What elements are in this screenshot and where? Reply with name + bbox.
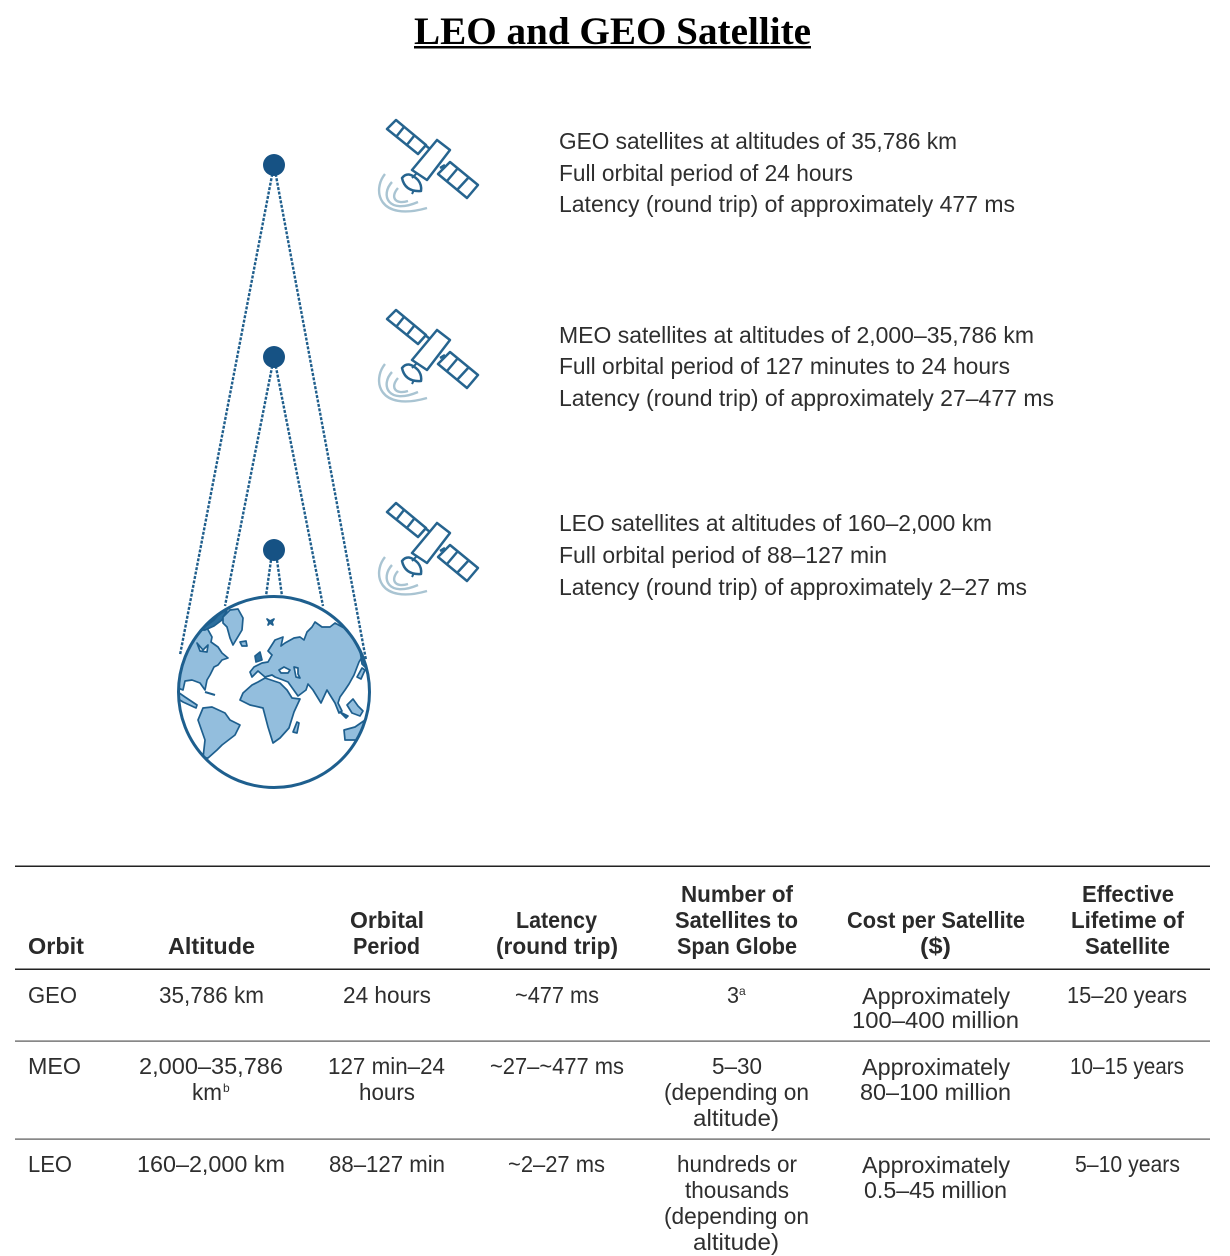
text block: LEO description: LEO satellites at altitudes of 160–2,000 km (559, 510, 992, 536)
table row: LEO: 160–2,000 km (137, 1151, 285, 1177)
table row: LEO: 5–10 years (1075, 1151, 1180, 1177)
LEO orbit dot (263, 539, 285, 561)
text block: MEO description: Full orbital period of 127 minutes to 24 hours (559, 353, 1010, 379)
table row: MEO (28, 1053, 1184, 1131)
table header row: Satellite (1085, 933, 1170, 959)
table row: MEO: hours (359, 1079, 415, 1105)
table row: MEO: b (223, 1081, 230, 1095)
eurasia (250, 622, 362, 713)
table row: LEO: ~2–27 ms (508, 1151, 605, 1177)
text block: GEO description: Latency (round trip) of approximately 477 ms (559, 191, 1015, 217)
table row: MEO: altitude) (693, 1105, 779, 1131)
table header row: Period (353, 933, 420, 959)
icon: MEO satellite (379, 310, 478, 401)
iceland (240, 641, 247, 646)
table header row: Orbit (28, 933, 84, 959)
arctic islands (198, 610, 227, 630)
madagascar (293, 722, 299, 733)
table row: GEO: 15–20 years (1067, 982, 1187, 1008)
text block: LEO description (559, 510, 1027, 600)
table row: LEO (28, 1151, 1180, 1255)
table row: GEO: a (739, 984, 746, 998)
table header row: ($) (920, 933, 951, 959)
table header row: Number of (681, 881, 793, 907)
table row: MEO: 80–100 million (860, 1079, 1011, 1105)
table row: LEO: hundreds or (677, 1151, 797, 1177)
table row: GEO: 100–400 million (852, 1007, 1019, 1033)
table row: MEO: (depending on (664, 1079, 809, 1105)
GEO coverage lines (180, 165, 366, 660)
table header row: Latency (516, 907, 597, 933)
north america (180, 629, 229, 691)
MEO orbit dot (263, 346, 285, 368)
table header row: Altitude (168, 933, 255, 959)
table row: MEO: Approximately (862, 1054, 1010, 1080)
icon: LEO satellite (379, 503, 478, 594)
africa (240, 678, 300, 743)
table header row (28, 881, 1184, 959)
black sea (279, 667, 290, 673)
table row: GEO: GEO (28, 982, 77, 1008)
table row: LEO: 88–127 min (329, 1151, 445, 1177)
table row: MEO: 10–15 years (1070, 1053, 1184, 1079)
text block: MEO description (559, 322, 1054, 411)
GEO orbit dot (263, 154, 285, 176)
text block: LEO description: Latency (round trip) of approximately 2–27 ms (559, 574, 1027, 600)
title: LEO and GEO Satellite (414, 10, 811, 53)
caspian sea (294, 667, 300, 678)
table header row: Orbital (350, 907, 424, 933)
indonesia (347, 699, 363, 716)
orbit diagram (170, 154, 370, 788)
table header row: Effective (1082, 881, 1174, 907)
text block: GEO description: GEO satellites at altitudes of 35,786 km (559, 128, 957, 154)
table row: GEO: Approximately (862, 983, 1010, 1009)
earth globe (170, 596, 370, 788)
table row: LEO: Approximately (862, 1152, 1010, 1178)
south america (198, 707, 240, 758)
comparison table (15, 866, 1210, 1255)
kamchatka (360, 654, 365, 668)
table header row: Satellites to (675, 907, 798, 933)
table header row: Lifetime of (1071, 907, 1184, 933)
text block: LEO description: Full orbital period of 88–127 min (559, 542, 887, 568)
table row: LEO: (depending on (664, 1203, 809, 1229)
table row: MEO: 5–30 (712, 1053, 762, 1079)
icon: GEO satellite (379, 120, 478, 211)
hudson bay (197, 643, 208, 652)
table row: GEO: 24 hours (343, 982, 431, 1008)
australia (343, 720, 364, 741)
table row: MEO: ~27–~477 ms (490, 1053, 624, 1079)
table row: GEO: ~477 ms (515, 982, 599, 1008)
table row: LEO: 0.5–45 million (864, 1177, 1007, 1203)
table header row: Span Globe (677, 933, 797, 959)
table row: GEO: 35,786 km (159, 982, 264, 1008)
MEO coverage lines (225, 357, 323, 606)
text block: GEO description (559, 128, 1015, 217)
table header row: Cost per Satellite (847, 907, 1025, 933)
text block: GEO description: Full orbital period of 24 hours (559, 160, 853, 186)
japan (357, 668, 365, 679)
table row: GEO: 3 (727, 982, 739, 1008)
text block: MEO description: Latency (round trip) of approximately 27–477 ms (559, 385, 1054, 411)
table row: MEO: MEO (28, 1053, 81, 1079)
LEO coverage lines (266, 560, 282, 596)
table row: LEO: altitude) (693, 1229, 779, 1255)
table header row: (round trip) (496, 933, 618, 959)
table row: GEO (28, 982, 1187, 1033)
svalbard (267, 619, 274, 625)
table row: LEO: thousands (685, 1177, 789, 1203)
table row: LEO: LEO (28, 1151, 72, 1177)
text block: MEO description: MEO satellites at altitudes of 2,000–35,786 km (559, 322, 1034, 348)
cuba (205, 692, 215, 695)
table row: MEO: 127 min–24 (328, 1053, 445, 1079)
table row: MEO: 2,000–35,786 (139, 1053, 283, 1079)
british isles (255, 652, 262, 662)
table row: MEO: km (192, 1079, 222, 1105)
greenland (223, 609, 243, 645)
